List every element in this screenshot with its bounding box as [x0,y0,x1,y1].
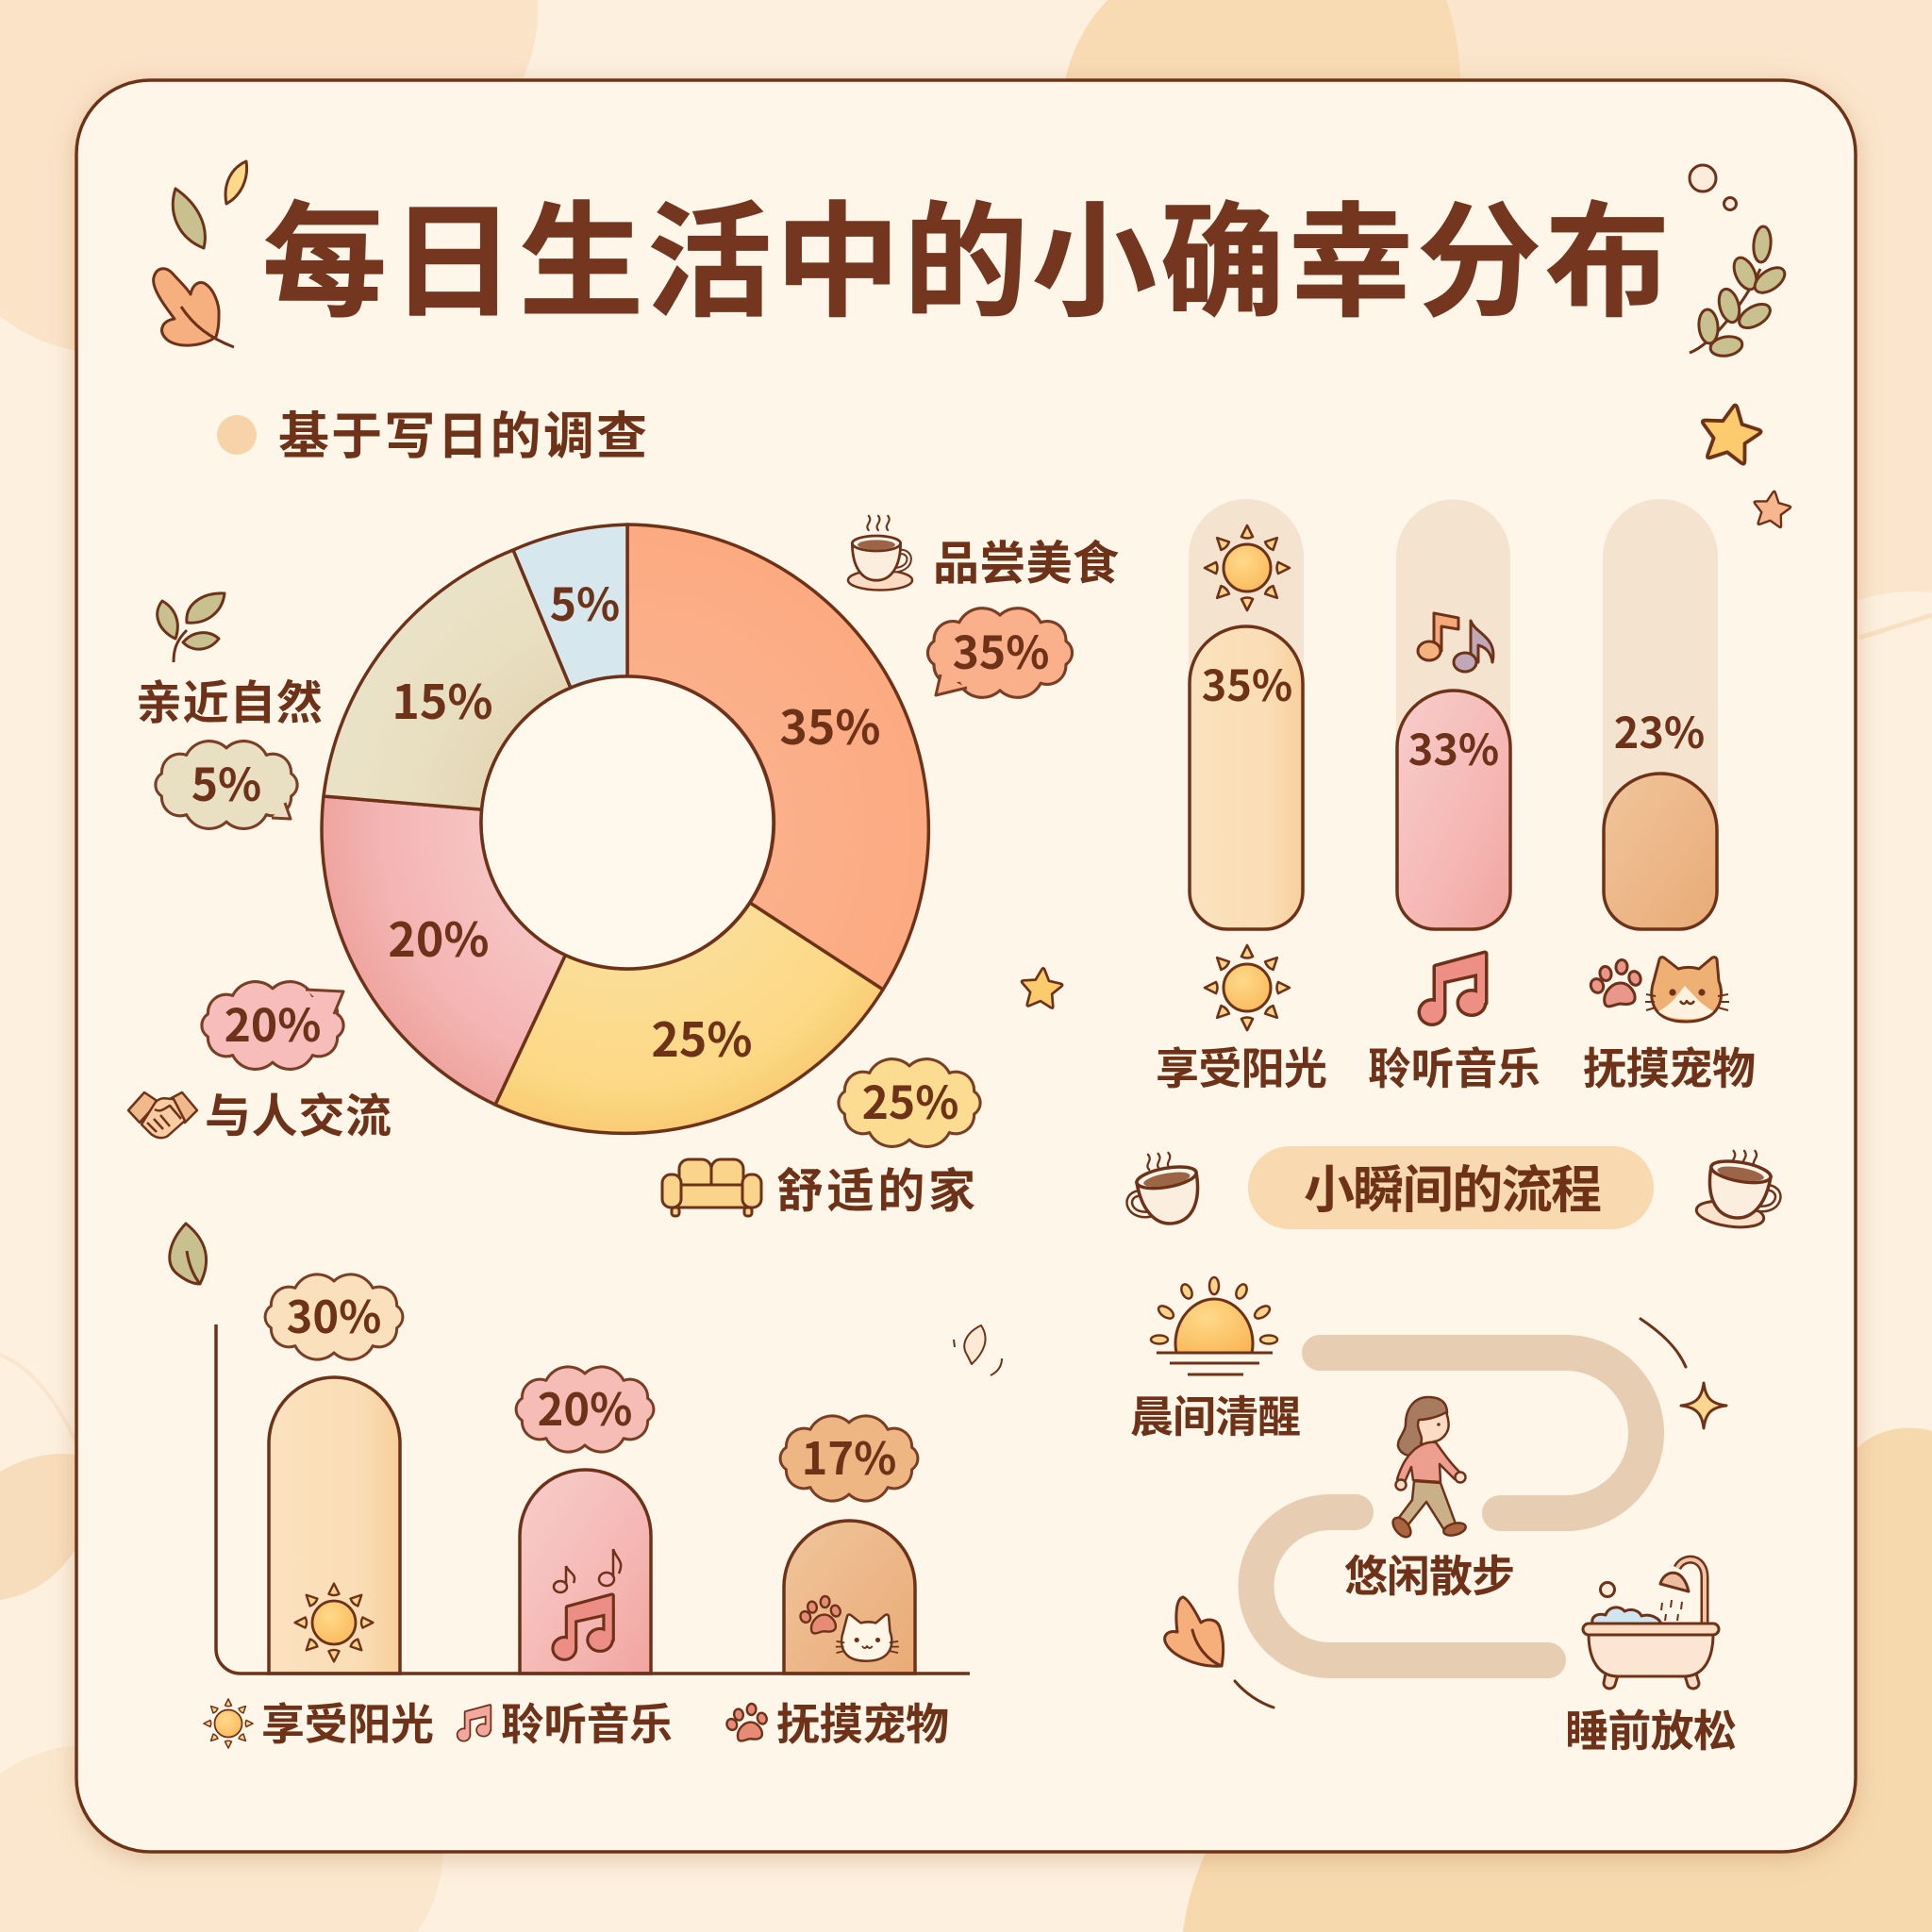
donut percentages [388,568,881,1071]
icon: coffee cup left [1124,1153,1205,1230]
label: nature: 亲近自然 [136,666,323,733]
bubble: 5% nature: 5% [192,748,261,814]
bubble: 20% people: 20% [225,989,321,1055]
bubble 30%: 30% [287,1281,381,1346]
bottom legend [204,1690,949,1753]
labels under right bars: 聆听音乐 [1368,1035,1541,1097]
step 1: morning: 晨间清醒 [1130,1383,1301,1445]
donut percentages: 20% [388,903,490,971]
label: tasting food [848,516,1119,593]
bubble: 5% nature [156,741,297,828]
step 3: bath [1565,1559,1737,1759]
icon: sun [1205,945,1290,1030]
labels under right bars: 享受阳光 [1156,1035,1327,1097]
flow path [1257,1353,1646,1660]
icon: sun in bar [295,1584,373,1661]
flow heading pill: 小瞬间的流程 [1304,1148,1602,1223]
donut percentages: 25% [651,1003,753,1071]
axis [216,1324,970,1674]
bars [269,1377,915,1674]
bar 1: sunshine: 35% [1202,652,1292,713]
step 2: person walking [1344,1397,1515,1605]
label: cozy home [662,1154,975,1222]
icon: notes in bar [554,1549,621,1658]
step 1: morning [1130,1277,1301,1445]
decorative stars [1020,400,1792,1008]
bubble 17%: 17% [802,1423,896,1488]
flow decorations [1165,1319,1726,1707]
bar 3: pets [1603,499,1718,929]
bottom legend: 聆听音乐 [501,1690,673,1753]
title leaves left [154,161,247,347]
title decoration right: bubbles and sprig [1690,165,1789,358]
label: people: 与人交流 [205,1079,391,1146]
bar 3: pets: 23% [1614,699,1705,760]
label: tasting food: 品尝美食 [933,526,1119,593]
icon: coffee cup right [1695,1151,1783,1231]
step 2: person walking: 悠闲散步 [1344,1542,1515,1605]
bubble: 25%: 25% [862,1066,958,1132]
panel: bottom bar chart [204,1274,970,1753]
label: nature [136,593,323,733]
labels under right bars [1156,1035,1756,1097]
bubble: 35% [927,608,1073,697]
bottom legend: 抚摸宠物 [776,1690,949,1753]
donut percentages: 5% [550,568,620,634]
bubble 17% [780,1416,918,1501]
bubble: 35%: 35% [953,616,1049,682]
bubble 30% [265,1274,403,1359]
bar 2: music [1396,500,1510,929]
label: cozy home: 舒适的家 [776,1154,975,1222]
panel: right bar chart [1156,499,1756,1097]
flow heading pill [1248,1146,1654,1229]
step 3: bath: 睡前放松 [1565,1697,1737,1759]
labels under right bars: 抚摸宠物 [1583,1035,1756,1097]
small leaves beside bottom chart [170,1224,1002,1375]
icon: cat [1645,958,1729,1022]
icon: music [1421,954,1485,1023]
donut percentages: 15% [391,665,493,733]
subtitle: 基于写日的调查 [278,394,647,469]
bar 1: sunshine [1189,499,1304,929]
bubble: 20% people [202,982,343,1069]
bubble: 25% [839,1059,980,1146]
bar 2: music: 33% [1408,716,1499,777]
bubble 20%: 20% [538,1374,632,1439]
bubble 20% [516,1367,654,1452]
donut chart [322,525,928,1133]
bottom legend: 享受阳光 [261,1690,434,1753]
icon: paw [1589,959,1642,1007]
donut percentages: 35% [779,691,881,758]
icon: paw and cat in bar [799,1596,899,1661]
title: 每日生活中的小确幸分布 [262,162,1670,342]
